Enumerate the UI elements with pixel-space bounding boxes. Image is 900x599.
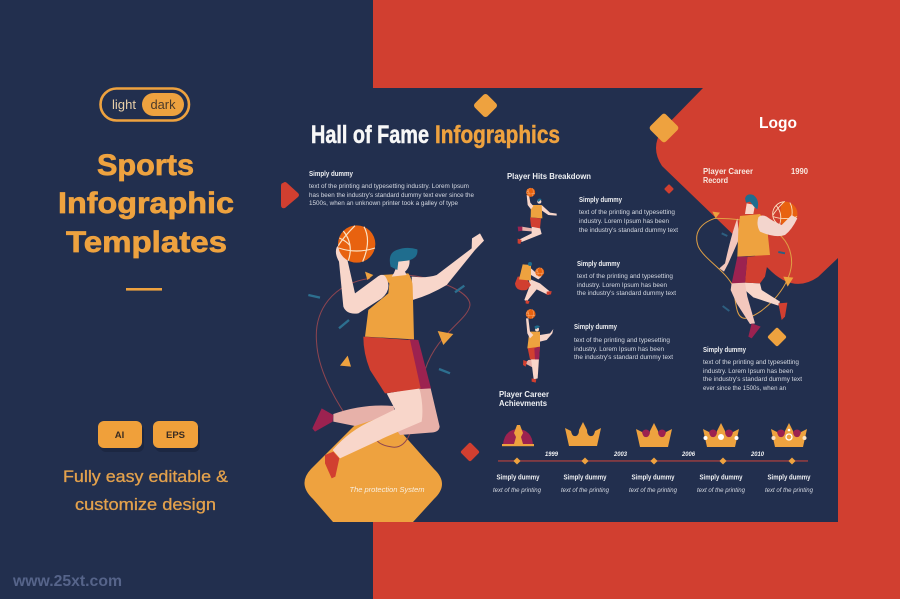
heading: sports infographic templates: Sports (97, 149, 194, 182)
main player illustration (308, 225, 484, 478)
timeline labels: Simply dummy (496, 474, 540, 482)
text block: hits 1 (579, 197, 678, 234)
icon: crown 1 (502, 425, 534, 446)
text block: player career record (703, 167, 809, 185)
timeline labels: text of the printing (697, 487, 745, 494)
small player 1 (518, 188, 557, 244)
text block: player career record: 1990 (791, 167, 809, 176)
text block: intro (309, 171, 474, 207)
button: AI: AI (115, 430, 124, 441)
icon: orange diamond blob (648, 112, 680, 144)
hexagon: protection system (304, 418, 442, 522)
subheading: fully editable: Fully easy editable & (63, 467, 229, 486)
timeline: 2006 (681, 452, 696, 458)
icon: orange diamond right (767, 327, 787, 347)
icon: crown 2 (565, 422, 601, 446)
text block: hits 1: Simply dummy (579, 197, 622, 204)
text block: right column: the industry's standard dummy text (703, 376, 802, 383)
subheading: fully editable: customize design (75, 495, 216, 514)
toggle: light dark: light (112, 98, 137, 112)
timeline labels (493, 474, 813, 494)
text block: hits 1: text of the printing and typesetting (579, 209, 675, 216)
logo: Logo (759, 115, 797, 132)
right player illustration (697, 194, 798, 338)
timeline labels: text of the printing (765, 487, 813, 494)
text block: hits 1: industry. Lorem Ipsum has been (579, 218, 669, 225)
icon: crown 4 (703, 423, 739, 447)
subheading: fully editable (63, 467, 229, 514)
text block: hits 3 (574, 324, 673, 361)
watermark: www.25xt.com (12, 573, 122, 590)
text block: hits 2: industry. Lorem Ipsum has been (577, 282, 667, 289)
timeline labels: Simply dummy (632, 474, 675, 482)
timeline labels: Simply dummy (564, 474, 607, 482)
text block: hits 3: the industry's standard dummy text (574, 354, 673, 361)
text block: hits 2: Simply dummy (577, 261, 620, 268)
small player 2 (515, 262, 552, 304)
text block: right column: ever since the 1500s, when an (703, 385, 786, 392)
text block: hits 1: the industry's standard dummy text (579, 227, 678, 234)
toggle: light dark (100, 88, 189, 120)
text block: right column: text of the printing and typesetting (703, 359, 799, 366)
icon: small red diamond (664, 184, 674, 194)
text block: hits 2: text of the printing and typesetting (577, 273, 673, 280)
icon: orange diamond top (473, 93, 498, 118)
panel: infographic card (280, 88, 838, 522)
text block: hits 2 (577, 261, 676, 297)
icon: crown 5 (771, 423, 807, 447)
heading: player career achievments (499, 390, 549, 408)
panel: red corner blob (656, 88, 838, 284)
icon: red play triangle (281, 182, 299, 208)
button: EPS: EPS (166, 430, 185, 441)
timeline labels: Simply dummy (768, 474, 811, 482)
heading: sports infographic templates: Infographic (58, 187, 234, 220)
text block: intro: text of the printing and typesetting industry. Lorem Ipsum (309, 183, 469, 190)
icon: red diamond (460, 442, 480, 462)
text block: hits 2: the industry's standard dummy text (577, 290, 676, 297)
timeline labels: text of the printing (493, 487, 541, 494)
hexagon: protection system: The protection System (350, 485, 424, 494)
background red right (373, 0, 900, 599)
text block: player career record: Record (703, 176, 728, 185)
heading: player career achievments: Achievments (499, 399, 548, 408)
text block: right column (703, 347, 802, 392)
title: Hall of Fame (311, 121, 429, 149)
timeline: 2003 (613, 452, 628, 458)
title (311, 121, 560, 149)
button: EPS (153, 421, 200, 452)
text block: intro: has been the industry's standard dummy text ever since the (309, 192, 474, 199)
timeline labels: text of the printing (561, 487, 609, 494)
text block: intro: 1500s, when an unknown printer took a galley of type (309, 200, 458, 207)
timeline: 1999 (545, 452, 559, 458)
background navy left (0, 0, 373, 599)
timeline labels: Simply dummy (700, 474, 743, 482)
timeline (498, 452, 808, 465)
timeline labels: text of the printing (629, 487, 677, 494)
title: Infographics (435, 121, 560, 149)
text block: player career record: Player Career (703, 167, 753, 176)
text block: right column: industry. Lorem Ipsum has been (703, 368, 793, 375)
small player 3 (523, 309, 553, 383)
toggle: light dark: dark (150, 98, 176, 112)
text block: hits 3: text of the printing and typesetting (574, 337, 670, 344)
heading: sports infographic templates: Templates (66, 226, 227, 259)
icon: crown 3 (636, 423, 672, 447)
heading: player career achievments: Player Career (499, 390, 549, 399)
text block: right column: Simply dummy (703, 347, 746, 354)
text block: hits 3: Simply dummy (574, 324, 617, 331)
text block: hits 3: industry. Lorem Ipsum has been (574, 346, 664, 353)
text block: intro: Simply dummy (309, 171, 353, 178)
timeline: 2010 (750, 452, 765, 458)
heading: player hits breakdown: Player Hits Breakdown (507, 172, 591, 181)
heading: sports infographic templates (58, 149, 234, 259)
button: AI (98, 421, 144, 452)
